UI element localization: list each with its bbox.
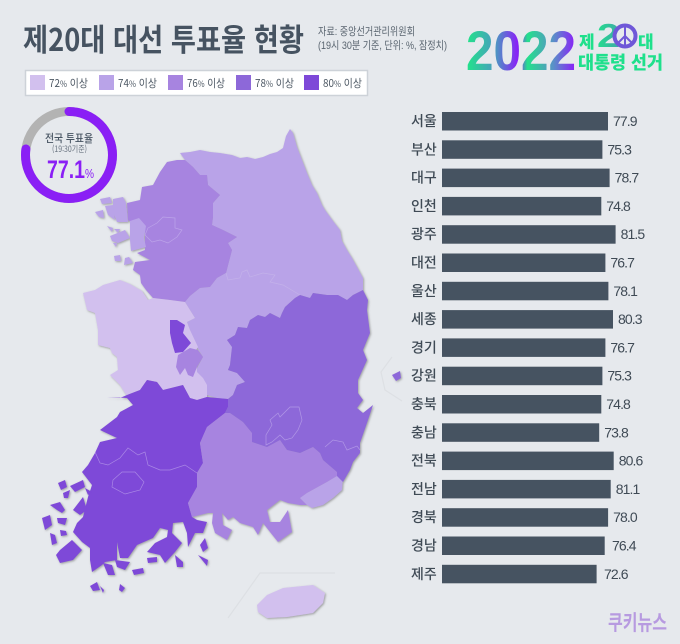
islands: southwest (42, 480, 208, 593)
bar: 강원: 75.3 (607, 368, 632, 384)
bar: 경북: 경북 (411, 507, 437, 527)
bar: 강원: 강원 (411, 366, 437, 386)
logo: 2022 제20대 대통령 선거: 대통령 선거 (578, 53, 663, 73)
bar: 제주 (411, 564, 629, 584)
donut: national turnout: (19:30기준) (52, 143, 87, 155)
title: 제20대 대선 투표율 현황 (23, 15, 304, 60)
bar: 광주 (411, 224, 645, 244)
bar: 울산 (411, 281, 638, 301)
bar: 전북: 전북 (411, 451, 437, 471)
region: Chungbuk (185, 270, 300, 400)
legend item 80: 80% 이상 (323, 75, 362, 91)
legend item 78 (236, 75, 294, 91)
bar: 대전: 대전 (411, 252, 437, 272)
region: Chungnam (83, 280, 207, 400)
bar: 광주: 광주 (411, 224, 437, 244)
region: Gyeongbuk (225, 290, 373, 482)
icon: peace sign (614, 25, 636, 47)
Ulleung inset frame line (381, 357, 402, 401)
logo: 2022 제20대 대통령 선거: 제 (579, 33, 595, 52)
map of South Korea (42, 129, 401, 618)
bar: 충북 (411, 394, 631, 414)
donut: national turnout: 전국 투표율 (45, 130, 93, 146)
bar: 세종: 세종 (411, 309, 437, 329)
bar: 부산: 부산 (411, 139, 437, 159)
bar: 전남 (411, 479, 640, 499)
legend item 78: 78% 이상 (255, 75, 294, 91)
bar: 전남: 81.1 (616, 481, 640, 497)
bar: 부산: 75.3 (607, 141, 632, 157)
bar: 인천 (411, 196, 631, 216)
bar: 울산: 78.1 (613, 283, 638, 299)
bar: 인천: 인천 (411, 196, 437, 216)
region: Gangwon (180, 129, 363, 300)
bar: 서울 (411, 111, 638, 131)
logo: 2022 제20대 대통령 선거 (466, 17, 663, 82)
Jeonnam border (95, 448, 197, 473)
island: Ulleungdo (392, 371, 401, 381)
bar: 경북: 78.0 (613, 509, 638, 525)
region: Daejeon (176, 348, 203, 377)
legend (26, 70, 368, 96)
legend item 74: 74% 이상 (118, 75, 157, 91)
bar: 경기: 경기 (411, 337, 437, 357)
bar: 충남: 충남 (411, 422, 437, 442)
region: Jeonbuk and Jeonnam (73, 380, 228, 572)
donut: national turnout (26, 112, 112, 198)
region: Gyeonggi (127, 160, 237, 302)
bar: 전북: 80.6 (619, 453, 643, 469)
islands: west sea (95, 197, 133, 265)
legend item 80 (304, 75, 362, 91)
bar: 세종 (411, 309, 643, 329)
region: Sejong (170, 320, 191, 353)
bar: 대구 (411, 168, 639, 188)
Gwangju outline (112, 472, 144, 494)
bar: 충남: 73.8 (604, 424, 629, 440)
bar: 충남 (411, 422, 629, 442)
legend item 72 (30, 75, 88, 91)
Daegu outline (266, 407, 302, 445)
bar: 경기 (411, 337, 635, 357)
bar: 대구: 78.7 (615, 170, 639, 186)
legend item 76 (168, 75, 225, 91)
bar: 충북: 74.8 (606, 396, 631, 412)
bar: 서울: 77.9 (613, 113, 638, 129)
logo: 2022 제20대 대통령 선거: 대 (638, 33, 654, 52)
bar: 충북: 충북 (411, 394, 437, 414)
legend item 72: 72% 이상 (49, 75, 88, 91)
bar: 경기: 76.7 (610, 339, 635, 355)
bar: 대전 (411, 252, 635, 272)
logo: 2022 제20대 대통령 선거: 2 (597, 17, 620, 54)
bar: 전남: 전남 (411, 479, 437, 499)
region: Gyeongnam (188, 413, 337, 542)
Chungbuk border highlight (226, 270, 300, 295)
legend item 74 (99, 75, 157, 91)
bar: 울산: 울산 (411, 281, 437, 301)
logo: 2022 제20대 대통령 선거: 2022 (466, 19, 576, 82)
bar: 광주: 81.5 (621, 226, 645, 242)
source note: (19시 30분 기준, 단위: %, 잠정치) (318, 39, 447, 52)
bar: 대구: 대구 (411, 168, 437, 188)
bar: 서울: 서울 (411, 111, 437, 131)
bar: 대전: 76.7 (610, 254, 635, 270)
bar: 세종: 80.3 (618, 311, 643, 327)
bar: 강원 (411, 366, 632, 386)
bar: 경남: 76.4 (612, 538, 637, 554)
donut: national turnout: 77.1% (47, 156, 94, 184)
bar: 인천: 74.8 (606, 198, 631, 214)
region: Busan and Ulsan coast (300, 476, 343, 508)
legend item 76: 76% 이상 (187, 75, 225, 91)
Gyeongbuk inner border (325, 440, 360, 450)
Seoul outline (145, 217, 182, 243)
bar chart (411, 111, 645, 584)
bar: 제주: 72.6 (604, 566, 629, 582)
island: Jeju (257, 585, 325, 618)
Jeju inset frame line (228, 573, 335, 618)
bar: 경북 (411, 507, 638, 527)
bar: 제주: 제주 (411, 564, 437, 584)
bar: 부산 (411, 139, 632, 159)
source note: 자료: 중앙선거관리위원회 (318, 25, 415, 38)
region: Incheon coast (130, 218, 146, 251)
source note (318, 25, 447, 52)
bar: 경남 (411, 536, 637, 556)
bar: 경남: 경남 (411, 536, 437, 556)
bar: 전북 (411, 451, 643, 471)
